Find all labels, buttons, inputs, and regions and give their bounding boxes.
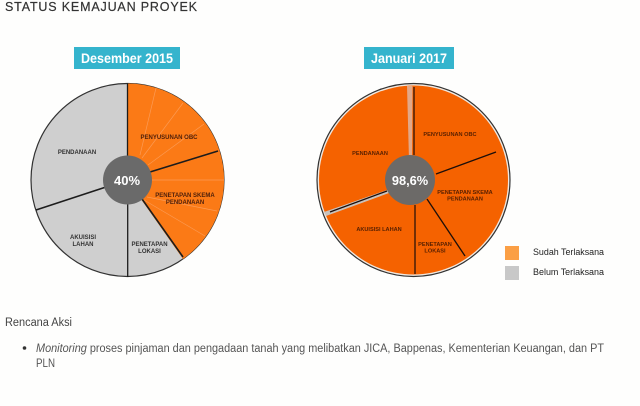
segment labels: LOKASI [138, 249, 161, 255]
segment labels: PENDANAAN [352, 151, 388, 157]
segment labels: LOKASI [424, 248, 446, 254]
legend item: Belum Terlaksana: Belum Terlaksana [533, 267, 604, 277]
segment labels: PENETAPAN SKEMA [155, 193, 215, 199]
action list [23, 343, 604, 370]
list item line 2: PLN [36, 358, 55, 370]
title: STATUS KEMAJUAN PROYEK [5, 0, 198, 14]
center value: 98,6%: 98,6% [392, 173, 429, 188]
heading: Desember 2015 [74, 47, 180, 69]
center value: 40%: 40% [114, 173, 140, 188]
pie chart: 98,6% [317, 84, 510, 276]
segment labels [352, 132, 493, 254]
list item line 1: Monitoring proses pinjaman dan pengadaan tanah yang melibatkan JICA, Bappenas, Kementerian Keuangan, dan PT [36, 343, 604, 355]
pie chart: 40% [31, 83, 224, 277]
bullet [23, 346, 26, 350]
segment labels: AKUISISI LAHAN [356, 227, 402, 233]
segment labels: AKUISISI [70, 235, 96, 241]
segment labels: PENYUSUNAN OBC [423, 132, 477, 138]
segment labels: PENYUSUNAN OBC [140, 135, 198, 141]
segment labels: PENDANAAN [58, 150, 96, 156]
segment labels: PENDANAAN [447, 196, 483, 202]
segment labels: PENETAPAN SKEMA [437, 190, 493, 196]
heading: Desember 2015: Desember 2015 [81, 50, 173, 66]
segment labels: PENETAPAN [131, 242, 168, 248]
segment labels: LAHAN [72, 242, 94, 248]
panel: Januari 2017 chart [317, 47, 510, 276]
panel: Desember 2015 chart [31, 47, 224, 277]
heading: Januari 2017: Januari 2017 [371, 50, 447, 66]
legend [505, 246, 604, 280]
segment labels [58, 135, 215, 255]
legend item: Sudah Terlaksana: Sudah Terlaksana [533, 247, 604, 257]
segment labels: PENETAPAN [418, 242, 452, 248]
segment labels: PENDANAAN [166, 200, 204, 206]
heading: Januari 2017 [364, 47, 454, 69]
heading: Rencana Aksi: Rencana Aksi [5, 317, 72, 329]
